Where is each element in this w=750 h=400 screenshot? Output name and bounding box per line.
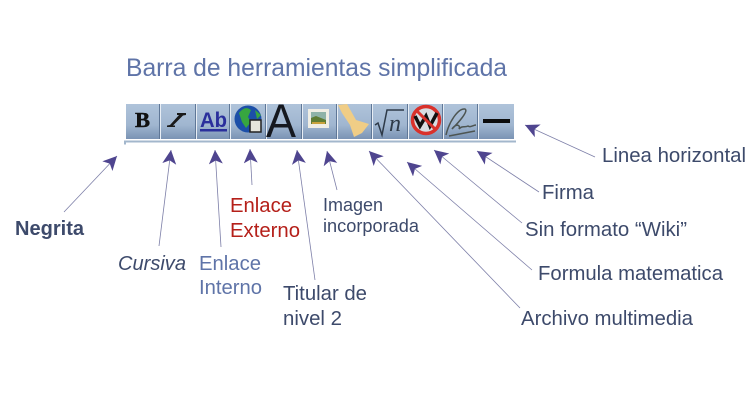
label: Linea horizontal: Linea horizontal: [602, 145, 746, 167]
arrow: Linea horizontal: [525, 125, 595, 157]
arrow: Firma: [477, 151, 539, 192]
icon: math formula: n: [389, 111, 401, 137]
label: Titular de nivel 2: nivel 2: [283, 308, 342, 330]
title: Barra de herramientas simplificada: [126, 55, 507, 82]
arrow: Sin formato: [434, 150, 522, 223]
icon: italic: [167, 113, 186, 127]
label: Titular de nivel 2: Titular de: [283, 283, 367, 305]
arrow: Enlace Externo: [250, 149, 252, 185]
icon: bold: B: [135, 108, 150, 132]
arrow: Negrita: [64, 156, 117, 212]
icon: no wiki format: [412, 106, 440, 134]
icon: math formula: [375, 110, 404, 137]
label: Archivo multimedia: Archivo multimedia: [521, 308, 694, 330]
icon: media horn: [338, 104, 369, 137]
arrow: Archivo multimedia: [369, 151, 520, 308]
icon: level 2 heading: A: [266, 94, 297, 147]
arrow: Titular: [297, 150, 315, 280]
icon: external link: [234, 106, 262, 132]
arrow: Formula matematica: [407, 162, 532, 270]
label: Enlace Externo: Externo: [230, 220, 300, 242]
label: Imagen incorporada: [323, 195, 420, 236]
arrow: Cursiva: [159, 150, 171, 246]
label: Enlace Interno: Interno: [199, 277, 262, 299]
icon: embedded image: [308, 109, 329, 128]
icon: horizontal line: [483, 119, 510, 123]
label: Titular de nivel 2: [283, 283, 367, 330]
label: Formula matematica: Formula matematica: [538, 263, 724, 285]
toolbar: [125, 94, 516, 147]
label: Cursiva: Cursiva: [118, 253, 186, 275]
label: Imagen incorporada: incorporada: [323, 216, 420, 236]
arrow: Enlace Interno: [215, 150, 221, 247]
label: Sin formato Wiki: Sin formato “Wiki”: [525, 219, 687, 241]
label: Enlace Externo: Enlace: [230, 195, 292, 217]
label: Imagen incorporada: Imagen: [323, 195, 383, 215]
icon: internal link: Ab: [200, 109, 227, 132]
label: Firma: Firma: [542, 182, 595, 204]
label: Enlace Interno: [199, 253, 262, 299]
label: Enlace Externo: [230, 195, 300, 242]
icon: signature: [446, 109, 476, 136]
label: Negrita: Negrita: [15, 218, 85, 240]
arrow: Imagen: [327, 151, 337, 190]
label: Enlace Interno: Enlace: [199, 253, 261, 275]
